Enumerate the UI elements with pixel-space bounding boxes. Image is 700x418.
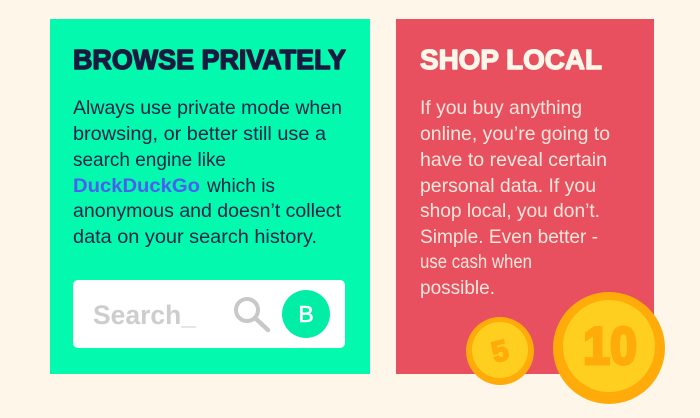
text block: browsing advice: Always use private mode when (73, 97, 342, 119)
icon: magnifying glass (236, 299, 268, 330)
text block: browsing advice (73, 97, 342, 248)
search placeholder: Search_ (93, 300, 197, 330)
icon: 10 coin: 10 (583, 317, 637, 376)
search bar (73, 280, 345, 348)
text block: browsing advice: DuckDuckGo (73, 175, 200, 197)
heading: shop local: SHOP LOCAL (420, 44, 602, 75)
icon: 5 coin: 5 (488, 334, 512, 370)
text block: shopping advice: have to reveal certain (420, 149, 607, 171)
text block: browsing advice: which is (206, 175, 275, 197)
icon: B button: B (298, 301, 314, 327)
text block: shopping advice: personal data. If you (420, 175, 596, 197)
icon: 5 coin (466, 317, 534, 385)
text block: shopping advice: Simple. Even better - (420, 226, 598, 248)
panel: browse privately (50, 19, 370, 374)
text block: browsing advice: data on your search history. (73, 226, 317, 248)
panel: shop local (396, 19, 654, 374)
text block: shopping advice (420, 97, 610, 299)
text block: shopping advice: online, you’re going to (420, 123, 610, 145)
text block: browsing advice: anonymous and doesn’t collect (73, 200, 342, 222)
text block: shopping advice: possible. (420, 277, 495, 299)
icon: 10 coin (553, 292, 665, 404)
text block: shopping advice: shop local, you don’t. (420, 200, 600, 222)
icon: B button (282, 290, 330, 338)
text block: shopping advice: If you buy anything (420, 97, 582, 119)
text block: browsing advice: search engine like (73, 149, 226, 171)
heading: browse privately: BROWSE PRIVATELY (73, 44, 346, 75)
text block: shopping advice: use cash when (420, 251, 532, 273)
text block: browsing advice: browsing, or better still use a (73, 123, 326, 145)
